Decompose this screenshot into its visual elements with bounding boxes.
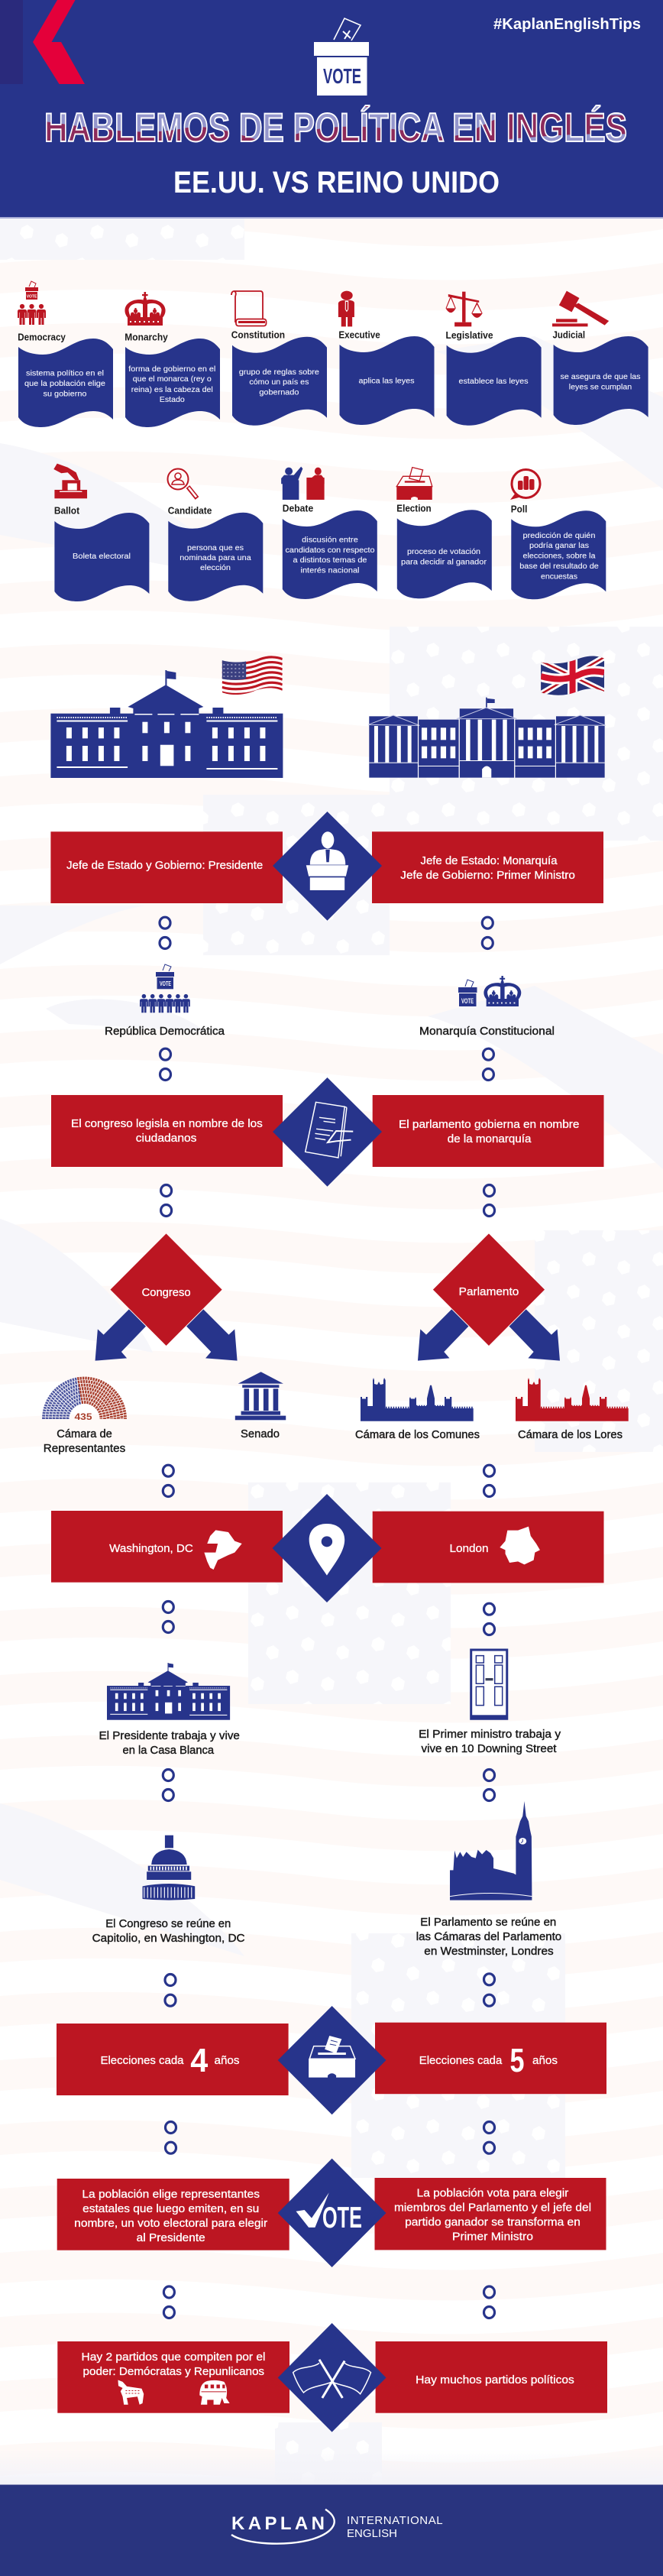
glossary: Ballot: Ballot xyxy=(54,504,80,516)
panel: Washington DC xyxy=(51,1511,283,1583)
panel: US head of state xyxy=(50,831,283,903)
icon: document signing diamond xyxy=(273,1077,382,1187)
panel: US head of state: Jefe de Estado y Gobierno: Presidente xyxy=(66,860,263,872)
panel: UK vote: La población vota para elegir xyxy=(417,2187,569,2199)
glossary: Democracy: su gobierno xyxy=(43,390,87,399)
panel: UK parties xyxy=(376,2341,607,2413)
glossary: Poll: Poll xyxy=(511,503,527,514)
arrow: Parlamento right xyxy=(509,1309,560,1361)
glossary: Ballot: Boleta electoral xyxy=(73,552,131,561)
chart: Congreso split into two chambers xyxy=(95,1233,238,1361)
panel: US vote xyxy=(57,2179,289,2250)
row: elections xyxy=(57,2006,606,2114)
connector dots xyxy=(165,2121,495,2153)
arrow: Parlamento left xyxy=(418,1309,468,1361)
text: Congress meets: Capitolio, en Washington, DC xyxy=(92,1933,245,1945)
panel: UK elections: Elecciones cada xyxy=(419,2055,503,2067)
panel: UK elections: años xyxy=(532,2055,558,2067)
diamond: Parlamento xyxy=(433,1233,545,1346)
glossary: Poll: elecciones, sobre la xyxy=(522,552,596,561)
glossary: Debate: candidatos con respecto xyxy=(286,546,375,555)
icon: map pin diamond xyxy=(272,1494,382,1602)
panel: UK elections xyxy=(375,2023,606,2094)
connector dots xyxy=(163,1465,495,1496)
connector dots xyxy=(163,1602,495,1635)
panel: congress legislates: El congreso legisla en nombre de los xyxy=(71,1118,263,1130)
glossary: Poll: base del resultado de xyxy=(519,562,599,571)
panel: London xyxy=(373,1512,603,1583)
chart: hemicycle of 435 seats: 435 xyxy=(75,1411,92,1422)
icon: UK flag xyxy=(541,656,605,695)
panel: congress legislates xyxy=(51,1095,283,1167)
panel: US vote: nombre, un voto electoral para elegir xyxy=(74,2218,267,2230)
icon: ballot box and people xyxy=(18,281,46,325)
icon: speaker at podium diamond xyxy=(273,812,382,921)
glossary: Poll: predicción de quién xyxy=(522,531,596,540)
icon: election box xyxy=(396,468,432,500)
text: Parliament meets: las Cámaras del Parlamento xyxy=(416,1931,561,1943)
icon: crown xyxy=(125,292,166,326)
panel: US parties: poder: Demócratas y Repunlicanos xyxy=(83,2366,264,2378)
icon: Senate building xyxy=(235,1372,286,1420)
icon: House of Lords skyline xyxy=(516,1378,629,1421)
connector dots xyxy=(161,1184,495,1217)
glossary: Debate xyxy=(281,467,377,599)
icon: ballot box and crown xyxy=(458,976,521,1006)
icon: magnifier on candidate xyxy=(168,469,197,498)
text: President: en la Casa Blanca xyxy=(122,1745,215,1757)
panel: parliament governs: El parlamento gobierna en nombre xyxy=(399,1119,579,1131)
connector dots xyxy=(160,1048,493,1081)
glossary: Election: proceso de votación xyxy=(407,547,480,556)
row: how leaders are chosen xyxy=(57,2159,606,2267)
connector dots xyxy=(163,1770,495,1800)
row: legislation xyxy=(51,1077,603,1187)
panel: UK elections: 5 xyxy=(510,2042,524,2079)
glossary: Constitution: grupo de reglas sobre xyxy=(239,368,319,377)
panel: London: London xyxy=(449,1543,489,1555)
glossary: Candidate xyxy=(168,469,263,601)
glossary: Executive: Executive xyxy=(338,329,380,340)
icon: crossed flags diamond xyxy=(278,2323,386,2432)
glossary: Monarchy xyxy=(125,292,220,427)
panel: US elections: Elecciones cada xyxy=(101,2055,184,2067)
text: Parliament meets xyxy=(416,1917,561,1958)
chart: hemicycle of 435 seats xyxy=(44,1378,125,1422)
panel: US elections xyxy=(57,2024,289,2095)
labels: chambers: Cámara de xyxy=(57,1428,112,1440)
glossary: Monarchy: reina) es la cabeza del xyxy=(131,385,213,394)
glossary: Debate: a distintos temas de xyxy=(293,556,367,565)
glossary: Constitution: Constitution xyxy=(231,329,285,340)
icon: speech bubble with bars xyxy=(510,469,540,500)
labels: chambers: Representantes xyxy=(44,1443,125,1455)
glossary: Debate: discusión entre xyxy=(302,535,358,544)
text: Parliament meets: en Westminster, Londres xyxy=(424,1946,554,1958)
panel: US vote: La población elige representantes xyxy=(82,2189,260,2201)
text: Congress meets xyxy=(92,1918,245,1945)
label: Congreso: Congreso xyxy=(142,1287,191,1299)
glossary: Monarchy: forma de gobierno en el xyxy=(128,365,215,374)
connector dots xyxy=(163,2286,495,2318)
panel: UK vote: miembros del Parlamento y el jefe del xyxy=(394,2202,591,2215)
chart: Parlamento split into two chambers xyxy=(418,1233,560,1361)
text: Prime Minister: vive en 10 Downing Street xyxy=(422,1743,556,1755)
glossary: Debate: Debate xyxy=(283,502,313,514)
glossary: Constitution xyxy=(231,291,327,426)
icon: ballot box and people: VOTE xyxy=(27,295,37,300)
logo: Kaplan International English xyxy=(231,2510,443,2544)
panel: parliament governs: de la monarquía xyxy=(448,1133,532,1145)
hashtag: #KaplanEnglishTips xyxy=(493,16,641,33)
icon: ballot box and citizens: VOTE xyxy=(160,980,171,987)
panel: UK head of state: Jefe de Estado: Monarquía xyxy=(420,855,558,867)
glossary: Candidate: Candidate xyxy=(168,504,212,516)
arrow: Congreso right xyxy=(186,1309,238,1361)
icon: US flag xyxy=(222,656,283,695)
glossary: Judicial: leyes se cumplan xyxy=(569,382,632,391)
icon: donkey xyxy=(118,2380,144,2405)
subtitle: EE.UU. VS REINO UNIDO xyxy=(173,166,500,199)
logo: Kaplan International English: KAPLAN xyxy=(231,2513,325,2534)
glossary: Democracy: sistema político en el xyxy=(26,368,104,377)
arrow: Congreso left xyxy=(95,1309,146,1361)
logo: Kaplan International English: ENGLISH xyxy=(347,2527,397,2540)
labels: chambers: Senado xyxy=(241,1428,280,1440)
glossary: Monarchy: que el monarca (rey o xyxy=(133,374,212,384)
glossary: Ballot xyxy=(53,464,149,601)
heading: Monarquía Constitucional: Monarquía Constitucional xyxy=(419,1026,555,1038)
icon: Big Ben and Parliament xyxy=(450,1801,532,1900)
panel: US vote: estatales que luego emiten, en su xyxy=(82,2203,259,2215)
panel: parliament governs xyxy=(373,1095,603,1167)
panel: UK vote: partido ganador se transforma en xyxy=(405,2216,581,2228)
text: Prime Minister xyxy=(419,1729,561,1755)
glossary: Candidate: elección xyxy=(200,563,231,572)
logo: Kaplan K mark xyxy=(0,0,85,84)
glossary: Debate: interés nacional xyxy=(301,565,359,575)
glossary: Candidate: nominada para una xyxy=(179,553,251,562)
glossary: Democracy: que la población elige xyxy=(24,379,105,388)
icon: House of Commons skyline xyxy=(361,1378,474,1421)
panel: US parties: Hay 2 partidos que compiten por el xyxy=(81,2351,266,2364)
glossary: Constitution: gobernado xyxy=(259,388,299,397)
header band xyxy=(0,0,663,219)
footer band xyxy=(0,2485,663,2576)
glossary: Candidate: persona que es xyxy=(187,543,244,552)
glossary: Executive: aplica las leyes xyxy=(359,376,414,385)
glossary: Poll: encuestas xyxy=(541,572,577,581)
icon: hand casting ballot xyxy=(53,464,87,498)
glossary: Election: Election xyxy=(396,502,432,514)
icon: scales xyxy=(445,292,483,326)
icon: header ballot box: VOTE xyxy=(323,64,361,88)
icon: two debaters at podiums xyxy=(281,467,325,500)
icon: scroll xyxy=(231,291,266,326)
text: President xyxy=(99,1730,240,1757)
icon: ballot box and crown: VOTE xyxy=(461,997,474,1005)
text: President: El Presidente trabaja y vive xyxy=(99,1730,240,1742)
labels: chambers xyxy=(44,1428,623,1455)
panel: UK parties: Hay muchos partidos políticos xyxy=(416,2374,574,2386)
panel: UK vote xyxy=(374,2178,606,2250)
heading: República Democrática: República Democrática xyxy=(105,1026,225,1038)
icon: 10 Downing Street door xyxy=(471,1650,508,1719)
panel: UK head of state xyxy=(372,831,603,903)
panel: Washington DC: Washington, DC xyxy=(109,1543,193,1555)
glossary: Executive xyxy=(338,291,434,425)
glossary: Election xyxy=(396,468,492,598)
text: Congress meets: El Congreso se reúne en xyxy=(105,1918,231,1930)
row: political parties xyxy=(57,2323,607,2432)
labels: chambers: Cámara de los Comunes xyxy=(355,1429,480,1441)
panel: US elections: 4 xyxy=(190,2042,209,2079)
text: Prime Minister: El Primer ministro trabaja y xyxy=(419,1729,561,1741)
icon: Buckingham palace xyxy=(368,698,606,778)
glossary: Democracy xyxy=(18,281,113,427)
panel: US vote: al Presidente xyxy=(137,2232,205,2244)
glossary: Judicial: se asegura de que las xyxy=(561,372,640,381)
label: Parlamento: Parlamento xyxy=(459,1286,519,1298)
glossary: Poll: podría ganar las xyxy=(529,541,589,550)
text: Parliament meets: El Parlamento se reúne en xyxy=(420,1917,556,1929)
glossary: Constitution: cómo un país es xyxy=(249,377,309,387)
glossary: Election: para decidir al ganador xyxy=(401,558,487,567)
diamond: Congreso xyxy=(110,1233,222,1346)
icon: US Capitol xyxy=(143,1836,195,1900)
icon: VOTE checkmark diamond: OTE xyxy=(322,2202,362,2234)
icon: person with tie xyxy=(338,291,354,326)
icon: White House xyxy=(50,670,283,778)
glossary: Legislative xyxy=(445,292,542,426)
icon: small White House xyxy=(107,1663,230,1720)
glossary: Democracy: Democracy xyxy=(18,331,66,342)
connector dots xyxy=(165,1974,495,2006)
logo: Kaplan International English: INTERNATIONAL xyxy=(347,2514,443,2527)
glossary: Monarchy: Estado xyxy=(160,395,185,404)
panel: US elections: años xyxy=(214,2055,240,2067)
glossary: Poll xyxy=(510,469,606,599)
glossary: Legislative: Legislative xyxy=(446,329,493,341)
glossary: Judicial xyxy=(552,291,648,425)
icon: gavel xyxy=(552,291,609,326)
row: head of state xyxy=(50,812,603,921)
icon: VOTE checkmark diamond xyxy=(278,2159,386,2267)
glossary: Judicial: Judicial xyxy=(553,329,585,340)
panel: UK vote: Primer Ministro xyxy=(452,2231,533,2244)
panel: congress legislates: ciudadanos xyxy=(136,1132,196,1145)
panel: UK head of state: Jefe de Gobierno: Primer Ministro xyxy=(400,870,575,882)
icon: ballot box diamond xyxy=(278,2006,386,2114)
labels: chambers: Cámara de los Lores xyxy=(518,1429,623,1441)
glossary: Legislative: establece las leyes xyxy=(458,377,529,386)
icon: ballot box and citizens xyxy=(140,964,190,1013)
glossary: Monarchy: Monarchy xyxy=(125,331,169,342)
icon: header ballot box xyxy=(314,18,369,96)
connector dots xyxy=(160,917,493,949)
icon: elephant xyxy=(199,2380,230,2405)
row: capitals xyxy=(51,1494,603,1602)
panel: US parties xyxy=(57,2341,289,2413)
